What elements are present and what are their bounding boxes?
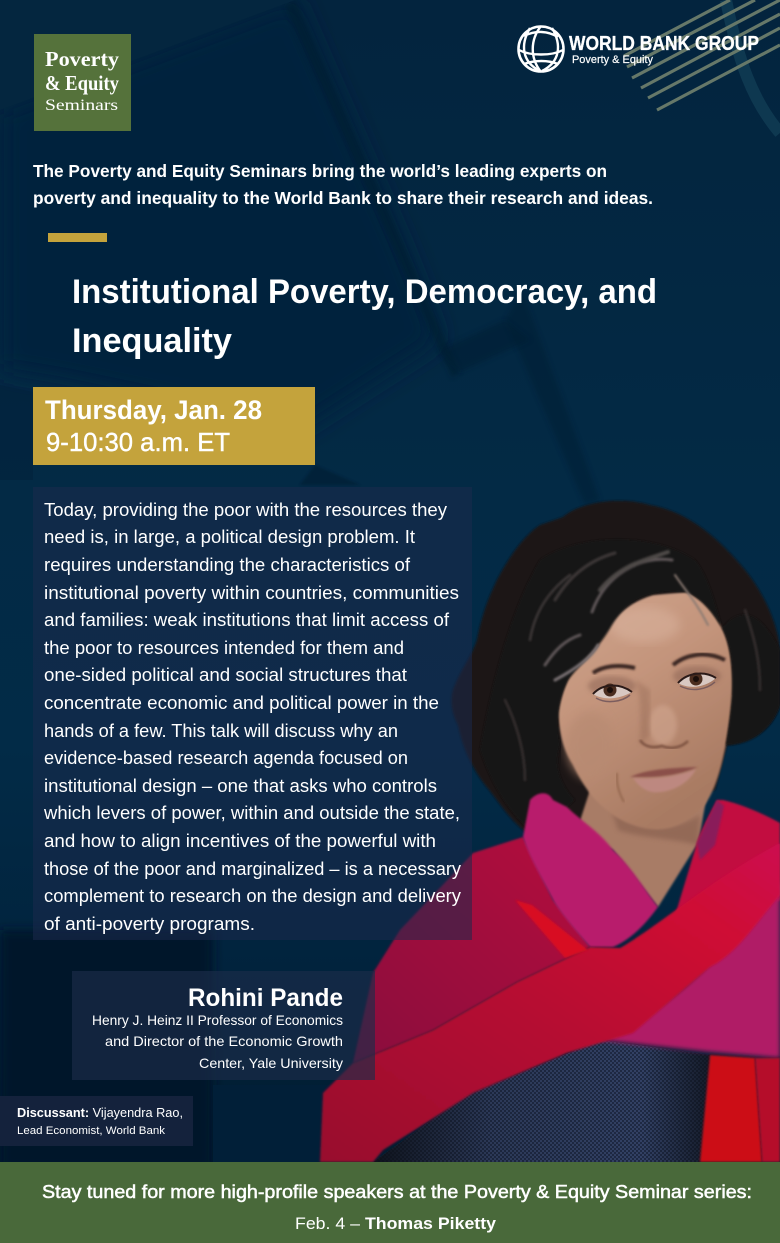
intro text: poverty and inequality to the World Bank to share their research and ideas.	[33, 188, 653, 208]
panel: abstract: hands of a few. This talk will discuss why an	[44, 721, 398, 741]
neck	[577, 790, 708, 907]
panel: discussant: Lead Economist, World Bank	[17, 1125, 166, 1137]
hair highlights	[505, 552, 760, 780]
lips	[630, 767, 698, 792]
panel: abstract: and families: weak institutions that limit access of	[44, 610, 450, 630]
panel: abstract: requires understanding the characteristics of	[44, 555, 411, 575]
hair right curls	[722, 615, 780, 745]
panel: speaker: Center, Yale University	[199, 1055, 343, 1071]
panel: abstract: evidence-based research agenda focused on	[44, 748, 408, 768]
title: Institutional Poverty, Democracy, and	[72, 273, 657, 311]
hair fringe over forehead	[480, 539, 722, 835]
panel: abstract: the poor to resources intended for them and	[44, 638, 404, 658]
scarf left fold	[353, 837, 590, 1063]
panel: abstract: complement to research on the design and delivery	[44, 886, 461, 906]
panel: abstract: institutional design – one that asks who controls	[44, 776, 437, 796]
green series logo: & Equity	[45, 71, 119, 95]
panel: abstract: of anti-poverty programs.	[44, 914, 255, 934]
date box	[33, 387, 315, 465]
panel: abstract: Today, providing the poor with the resources they	[44, 500, 447, 520]
date box: 9-10:30 a.m. ET	[46, 427, 230, 457]
intro text	[33, 161, 653, 208]
panel: discussant	[0, 1096, 193, 1146]
panel: speaker: Rohini Pande	[188, 984, 343, 1012]
World Bank Group logo: Poverty & Equity	[572, 54, 653, 66]
green series logo: Seminars	[45, 97, 118, 114]
right scarf tail	[700, 1055, 762, 1162]
scarf collar	[523, 793, 658, 947]
eye sockets	[588, 676, 636, 696]
panel: speaker: and Director of the Economic Growth	[105, 1033, 343, 1049]
face	[558, 592, 733, 829]
smile line	[617, 773, 624, 802]
title	[72, 273, 657, 360]
green series logo	[34, 34, 131, 131]
magenta lower right	[600, 880, 780, 1058]
nose	[640, 740, 688, 748]
eyebrows	[593, 655, 725, 673]
portrait of speaker	[320, 501, 780, 1162]
panel: speaker	[72, 971, 375, 1080]
green series logo: Poverty	[45, 47, 120, 71]
crossed scarf band	[320, 843, 780, 1162]
panel: abstract: need is, in large, a political design problem. It	[44, 527, 415, 547]
hair back	[452, 501, 780, 835]
intro text: The Poverty and Equity Seminars bring the world’s leading experts on	[33, 161, 607, 181]
panel: abstract: which levers of power, within and outside the state,	[43, 803, 460, 823]
gold accent bar	[48, 233, 107, 242]
panel: abstract	[33, 487, 472, 940]
title: Inequality	[72, 322, 232, 360]
footer banner	[0, 1162, 780, 1243]
decorative diagonal lines top right	[624, 0, 780, 133]
footer banner: Feb. 4 – Thomas Piketty	[295, 1215, 497, 1233]
footer banner: Stay tuned for more high-profile speakers at the Poverty & Equity Seminar series:	[42, 1182, 752, 1202]
scarf right shoulder	[660, 800, 780, 965]
bright red stripe	[515, 900, 588, 958]
date box: Thursday, Jan. 28	[45, 395, 262, 425]
cheek and nose shading	[566, 711, 614, 779]
panel: abstract: institutional poverty within countries, communities	[44, 583, 459, 603]
panel: abstract: those of the poor and marginalized – is a necessary	[44, 859, 461, 879]
panel: discussant: Discussant: Vijayendra Rao,	[17, 1105, 183, 1120]
panel: abstract: and how to align incentives of the powerful with	[44, 831, 436, 851]
World Bank Group logo	[518, 26, 759, 72]
icon: globe	[518, 26, 564, 72]
panel: speaker: Henry J. Heinz II Professor of Economics	[92, 1012, 343, 1028]
panel: abstract: concentrate economic and political power in the	[44, 693, 439, 713]
sweater	[373, 1040, 710, 1162]
panel: abstract: one-sided political and social structures that	[44, 665, 407, 685]
eyes	[593, 672, 716, 702]
